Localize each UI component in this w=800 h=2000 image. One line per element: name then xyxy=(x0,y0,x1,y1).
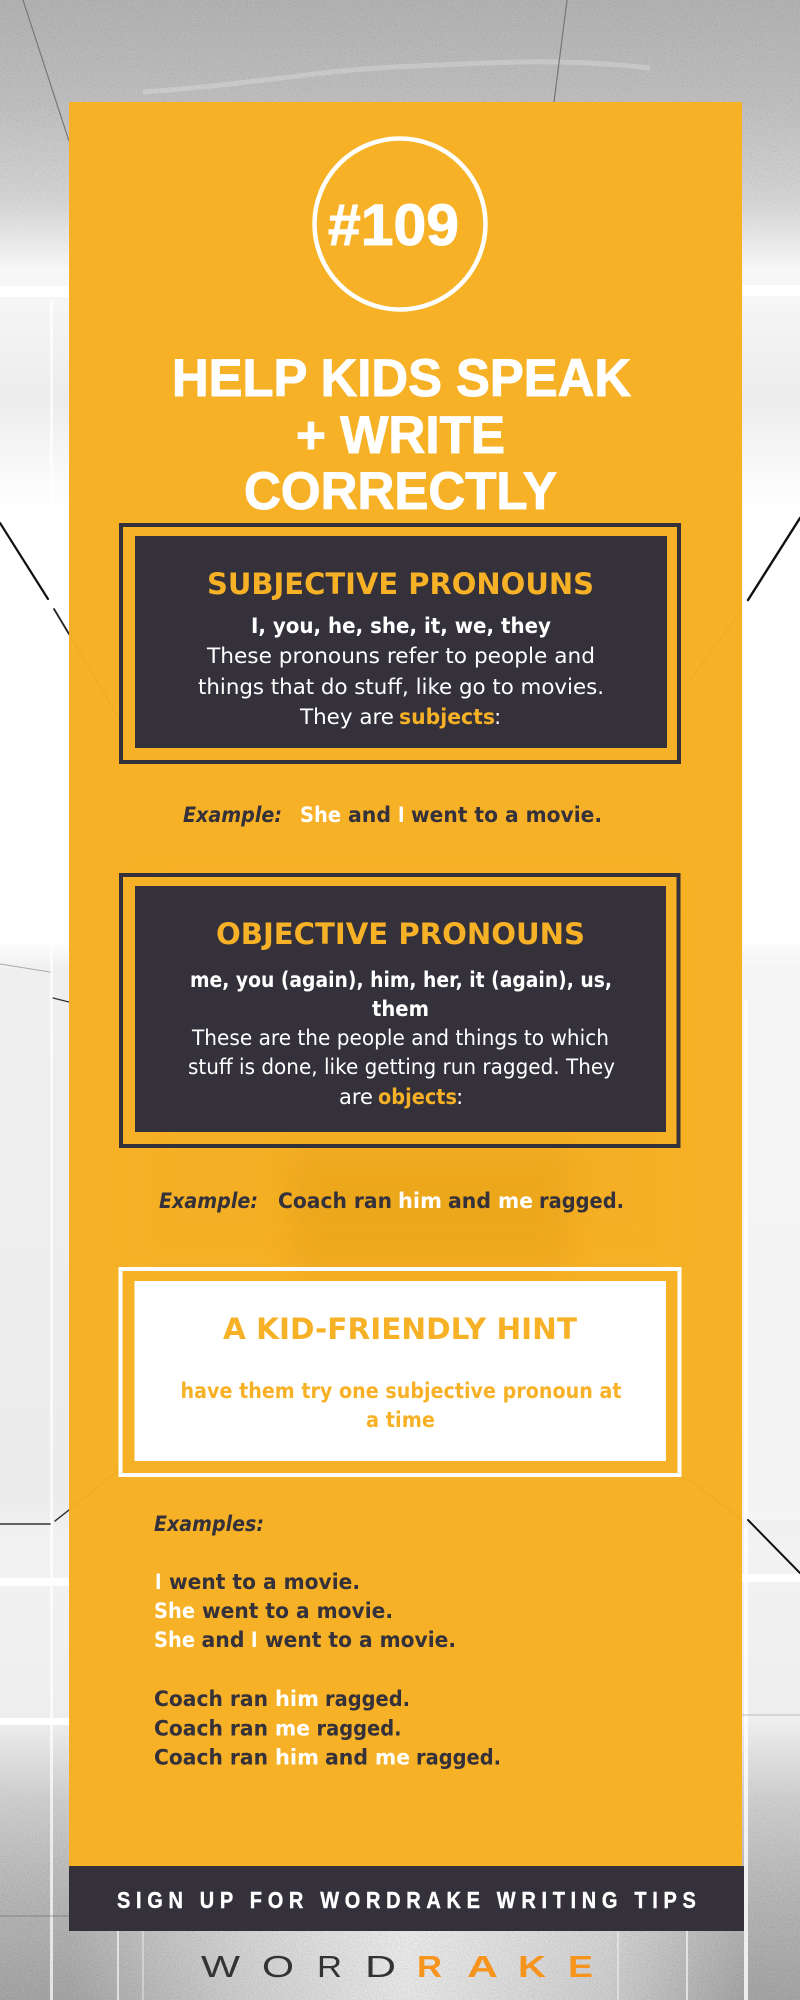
objective examples: Coach ran xyxy=(154,1687,268,1712)
example: subjective: She xyxy=(300,803,341,828)
subjective examples: went to a movie. xyxy=(169,1570,360,1595)
objective pronoun list: them xyxy=(372,997,429,1022)
hint text: a time xyxy=(366,1408,435,1433)
subjective description: : xyxy=(494,705,501,730)
objective examples: me xyxy=(275,1716,310,1742)
example: objective: ragged. xyxy=(539,1189,624,1214)
objective examples: and xyxy=(325,1746,368,1770)
subjective examples: went to a movie. xyxy=(202,1599,393,1624)
example: subjective: I xyxy=(398,803,404,828)
sign-up bar xyxy=(69,1866,744,1931)
panel: subjective pronouns xyxy=(121,525,679,762)
example: subjective: went to a movie. xyxy=(411,803,602,828)
objective examples: ragged. xyxy=(316,1716,402,1742)
objective examples xyxy=(154,1687,501,1770)
logo: wordrake: R xyxy=(317,1949,342,1984)
objective examples: him xyxy=(275,1746,319,1770)
objective pronoun list: me, you (again), him, her, it (again), us, xyxy=(190,968,612,993)
objective description: objects xyxy=(378,1085,457,1110)
logo: wordrake xyxy=(201,1949,593,1984)
hint text: have them try one subjective pronoun at xyxy=(180,1379,622,1404)
subjective examples: She xyxy=(154,1599,195,1624)
objective description: are xyxy=(339,1085,373,1110)
subjective description: subjects xyxy=(399,705,495,730)
example: subjective: and xyxy=(348,803,391,828)
objective examples: Coach ran xyxy=(154,1746,268,1770)
badge: #109 circle xyxy=(314,138,486,310)
subjective pronoun list: I, you, he, she, it, we, they xyxy=(251,614,551,639)
example: objective: Coach ran xyxy=(278,1189,392,1214)
objective description: These are the people and things to which xyxy=(191,1026,609,1051)
example: objective: him xyxy=(398,1189,442,1214)
objective examples: Coach ran xyxy=(154,1716,268,1742)
title: HELP KIDS SPEAK xyxy=(172,349,631,408)
subjective description: They are xyxy=(299,705,394,730)
objective pronoun list xyxy=(190,968,612,1022)
heading: hint: A KID-FRIENDLY HINT xyxy=(223,1312,577,1346)
title: + WRITE xyxy=(296,406,505,465)
objective description: stuff is done, like getting run ragged. They xyxy=(188,1055,615,1080)
logo: wordrake: D xyxy=(365,1949,396,1984)
logo: wordrake: O xyxy=(262,1949,294,1984)
subjective examples: went to a movie. xyxy=(265,1628,456,1653)
subjective description: These pronouns refer to people and xyxy=(206,644,595,669)
example: subjective: Example: xyxy=(183,803,282,828)
logo: wordrake: W xyxy=(201,1949,241,1984)
subjective examples: and xyxy=(202,1628,244,1653)
examples label: Examples: xyxy=(154,1512,264,1537)
title: CORRECTLY xyxy=(244,462,557,521)
sign-up bar: SIGN UP FOR WORDRAKE WRITING TIPS xyxy=(117,1886,696,1913)
subjective examples: I xyxy=(155,1570,162,1595)
example: objective: Example: xyxy=(159,1189,258,1214)
objective examples: ragged. xyxy=(416,1746,501,1770)
subjective description xyxy=(198,644,604,730)
example: objective: me xyxy=(498,1189,533,1214)
example: objective xyxy=(159,1189,624,1214)
logo: wordrake: A xyxy=(467,1949,498,1984)
badge: #109 circle: #109 xyxy=(328,193,459,258)
heading: objective pronouns: OBJECTIVE PRONOUNS xyxy=(216,917,585,951)
subjective description: things that do stuff, like go to movies. xyxy=(198,675,604,700)
objective description: : xyxy=(456,1085,463,1110)
logo: wordrake: R xyxy=(417,1949,442,1984)
panel: objective pronouns xyxy=(121,875,678,1146)
objective description xyxy=(188,1026,615,1110)
hint text xyxy=(180,1379,622,1433)
subjective examples: I xyxy=(251,1628,258,1653)
objective examples: him xyxy=(275,1687,319,1712)
panel: kid-friendly hint xyxy=(120,1269,680,1475)
objective examples: me xyxy=(375,1746,410,1770)
example: objective: and xyxy=(448,1189,491,1214)
title xyxy=(172,349,631,521)
logo: wordrake: E xyxy=(568,1949,593,1984)
objective examples: ragged. xyxy=(325,1687,410,1712)
subjective examples xyxy=(154,1570,456,1653)
heading: subjective pronouns: SUBJECTIVE PRONOUNS xyxy=(207,567,594,601)
logo: wordrake: K xyxy=(518,1949,547,1984)
subjective examples: She xyxy=(154,1628,195,1653)
example: subjective xyxy=(183,803,602,828)
examples list xyxy=(154,1512,501,1770)
panel: amber main panel xyxy=(69,102,742,1866)
